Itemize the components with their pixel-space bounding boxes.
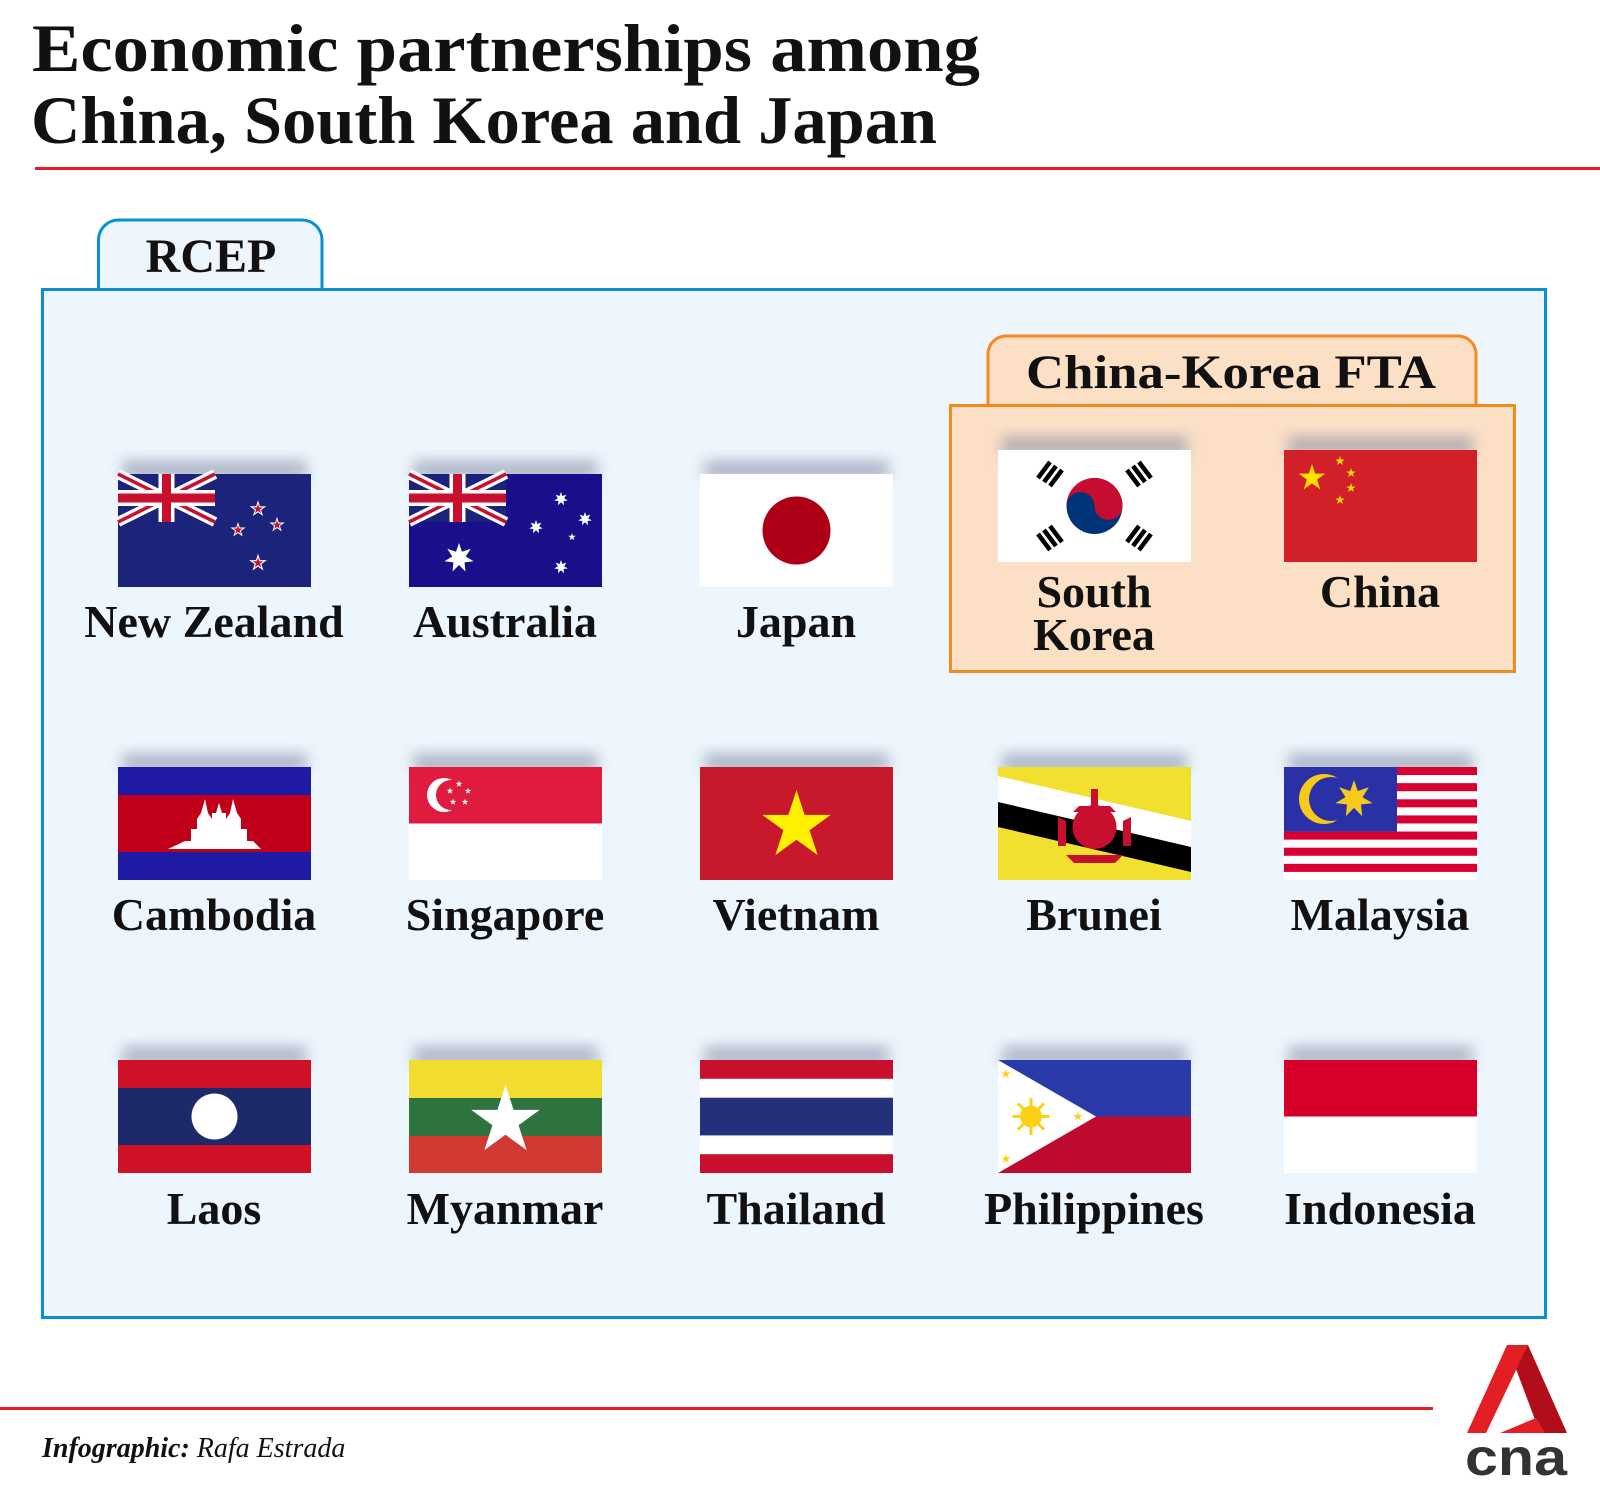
flag: China xyxy=(1284,436,1477,562)
label: Myanmar: Myanmar xyxy=(407,1183,603,1234)
flag: Brunei xyxy=(998,753,1191,880)
label: Japan: Japan xyxy=(736,596,856,647)
flag: Singapore xyxy=(409,753,602,880)
label: Australia: Australia xyxy=(413,596,597,647)
panel: RCEP xyxy=(42,220,1546,1318)
credit: Infographic: Rafa Estrada xyxy=(41,1433,345,1464)
logo: cna xyxy=(1465,1345,1568,1487)
label: South Korea: South xyxy=(1036,566,1152,617)
flag: Cambodia xyxy=(118,753,311,880)
label: Indonesia: Indonesia xyxy=(1284,1183,1476,1234)
flag: Laos xyxy=(118,1046,311,1173)
flag: Japan xyxy=(700,460,893,587)
RCEP tab xyxy=(98,220,322,290)
label: Brunei: Brunei xyxy=(1026,889,1162,940)
logo: cna: cna xyxy=(1465,1429,1568,1487)
label: Philippines: Philippines xyxy=(984,1183,1204,1234)
label: Thailand: Thailand xyxy=(706,1183,886,1234)
panel: China-Korea FTA xyxy=(950,336,1514,672)
label: Cambodia: Cambodia xyxy=(112,889,316,940)
label: Malaysia: Malaysia xyxy=(1291,889,1469,940)
title xyxy=(31,10,980,158)
RCEP tab: RCEP xyxy=(146,230,276,283)
flag: New Zealand xyxy=(118,460,311,587)
flag: Thailand xyxy=(700,1046,893,1173)
flag: Malaysia xyxy=(1284,753,1477,880)
flag: Myanmar xyxy=(409,1046,602,1173)
label: China: China xyxy=(1320,566,1440,617)
title: Economic partnerships among xyxy=(32,10,980,86)
label: Singapore: Singapore xyxy=(406,889,604,940)
label: South Korea: Korea xyxy=(1033,609,1155,660)
title: China, South Korea and Japan xyxy=(31,82,937,158)
flag: Australia xyxy=(409,460,602,587)
label: Laos: Laos xyxy=(167,1183,261,1234)
flag: Vietnam xyxy=(700,753,893,880)
flag: South Korea xyxy=(998,436,1191,562)
flag: Indonesia xyxy=(1284,1046,1477,1173)
label: Vietnam: Vietnam xyxy=(713,889,879,940)
flag: Philippines xyxy=(998,1046,1191,1173)
label: New Zealand: New Zealand xyxy=(84,596,344,647)
panel: China-Korea FTA: China-Korea FTA xyxy=(1026,346,1436,399)
